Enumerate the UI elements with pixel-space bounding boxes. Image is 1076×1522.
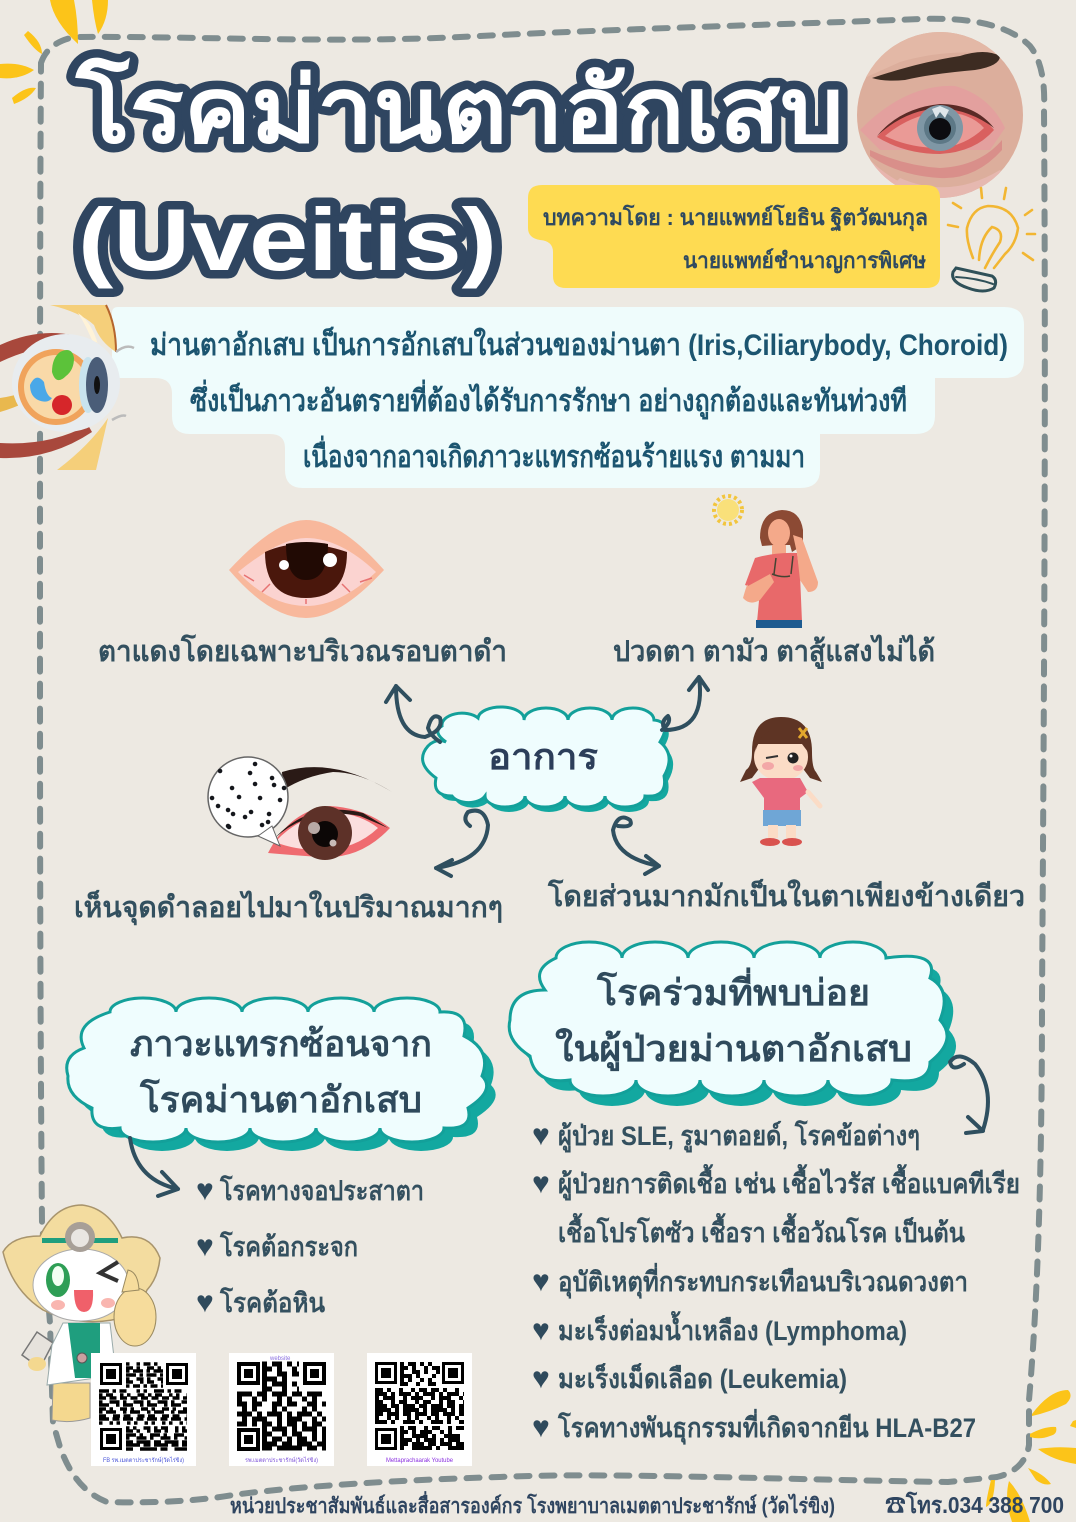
list: complications: ♥ <box>196 1230 214 1263</box>
list: complications: โรคต้อหิน <box>219 1286 325 1318</box>
arrow: to one-eye note <box>613 818 659 874</box>
icon: red eye <box>229 520 384 618</box>
author name: บทความโดย : นายแพทย์โยธิน ฐิตวัฒนกุล <box>543 204 928 232</box>
qr: Facebook <box>91 1353 196 1466</box>
list: comorbidities: ♥ <box>532 1119 550 1152</box>
title: Uveitis: (Uveitis) <box>78 190 497 289</box>
mascot: doctor character <box>3 1205 160 1422</box>
list: comorbidities: ♥ <box>532 1314 550 1347</box>
footer: department: หน่วยประชาสัมพันธ์และสื่อสารองค์กร โรงพยาบาลเมตตาประชารักษ์ (วัดไร่ขิง) <box>230 1490 835 1518</box>
photo: inflamed eye <box>855 30 1027 200</box>
decoration: top-left sunburst <box>0 0 108 104</box>
callout: comorbidities cloud <box>509 942 956 1106</box>
qr caption: FB รพ.เมตตาประชารักษ์(วัดไร่ขิง) <box>103 1456 184 1464</box>
icon: woman with sore eyes <box>743 510 818 628</box>
list: complications <box>196 1174 424 1319</box>
list: comorbidities: ♥ <box>532 1362 550 1395</box>
arrow: to woman <box>662 677 708 730</box>
arrow: to complications list <box>130 1138 178 1196</box>
title: disease name in Thai: โรคม่านตาอักเสบ <box>75 57 844 162</box>
icon: girl rubbing eye <box>740 717 822 846</box>
list: comorbidities: ผู้ป่วย SLE, รูมาตอยด์, โรคข้อต่างๆ <box>558 1119 920 1153</box>
definition text: เนื่องจากอาจเกิดภาวะแทรกซ้อนร้ายแรง ตามมา <box>303 435 805 474</box>
list: comorbidities: ♥ <box>532 1167 550 1200</box>
symptom: floaters: เห็นจุดดำลอยไปมาในปริมาณมากๆ <box>74 889 503 925</box>
list: comorbidities: อุบัติเหตุที่กระทบกระเทือนบริเวณดวงตา <box>558 1262 968 1299</box>
list: comorbidities: ♥ <box>532 1265 550 1298</box>
complications heading <box>130 1023 432 1120</box>
comorbidities heading: ในผู้ป่วยม่านตาอักเสบ <box>555 1027 912 1072</box>
icon: sun <box>714 496 742 524</box>
qr: YouTube <box>367 1353 472 1466</box>
qr: website <box>229 1353 334 1466</box>
list: comorbidities: มะเร็งต่อมน้ำเหลือง (Lymphoma) <box>558 1310 907 1346</box>
comorbidities heading <box>555 967 912 1072</box>
callout: complications cloud <box>67 998 496 1151</box>
list: comorbidities: เชื้อโปรโตซัว เชื้อรา เชื้อวัณโรค เป็นต้น <box>558 1212 965 1248</box>
qr caption: Mettaprachaarak Youtube <box>386 1458 454 1464</box>
decoration: bottom-right sunburst <box>986 1390 1076 1522</box>
list: comorbidities: ♥ <box>532 1411 550 1444</box>
panel: comorbidities <box>509 942 1020 1445</box>
symptom: eye pain: ปวดตา ตามัว ตาสู้แสงไม่ได้ <box>613 634 935 669</box>
complications heading: ภาวะแทรกซ้อนจาก <box>130 1023 432 1064</box>
panel: symptoms <box>74 496 1025 925</box>
arrow: to red eye <box>386 686 441 742</box>
definition text <box>150 326 1008 474</box>
list: comorbidities <box>532 1119 1020 1445</box>
callout: symptoms cloud <box>423 707 673 812</box>
qr caption: รพ.เมตตาประชารักษ์(วัดไร่ขิง) <box>245 1456 318 1464</box>
symptom: red around iris: ตาแดงโดยเฉพาะบริเวณรอบตาดำ <box>98 633 507 668</box>
symptom: usually one eye: โดยส่วนมากมักเป็นในตาเพียงข้างเดียว <box>547 878 1025 913</box>
complications heading: โรคม่านตาอักเสบ <box>139 1078 422 1120</box>
arrow: to floaters <box>436 811 488 876</box>
panel: definition <box>112 307 1024 488</box>
panel: complications <box>67 998 496 1319</box>
arrow: to comorbidity list <box>950 1056 988 1133</box>
qr label: website <box>269 1356 291 1362</box>
list: comorbidities: มะเร็งเม็ดเลือด (Leukemia) <box>558 1361 847 1394</box>
comorbidities heading: โรคร่วมที่พบบ่อย <box>596 967 870 1013</box>
list: complications: ♥ <box>196 1286 214 1319</box>
list: complications: โรคทางจอประสาตา <box>219 1174 424 1206</box>
list: comorbidities: โรคทางพันธุกรรมที่เกิดจากยีน HLA-B27 <box>557 1408 976 1445</box>
panel: article author <box>528 185 940 288</box>
author title: นายแพทย์ชำนาญการพิเศษ <box>683 248 926 274</box>
definition text: ซึ่งเป็นภาวะอันตรายที่ต้องได้รับการรักษา อย่างถูกต้องและทันท่วงที <box>190 379 907 420</box>
list: complications: ♥ <box>196 1174 214 1207</box>
icon: light bulb <box>948 188 1035 291</box>
icon: eye anatomy with germs <box>0 305 134 470</box>
icon: floaters eye <box>208 757 392 860</box>
list: comorbidities: ผู้ป่วยการติดเชื้อ เช่น เชื้อไวรัส เชื้อแบคทีเรีย <box>558 1163 1020 1201</box>
symptoms heading: อาการ <box>488 736 599 777</box>
list: complications: โรคต้อกระจก <box>219 1230 358 1262</box>
